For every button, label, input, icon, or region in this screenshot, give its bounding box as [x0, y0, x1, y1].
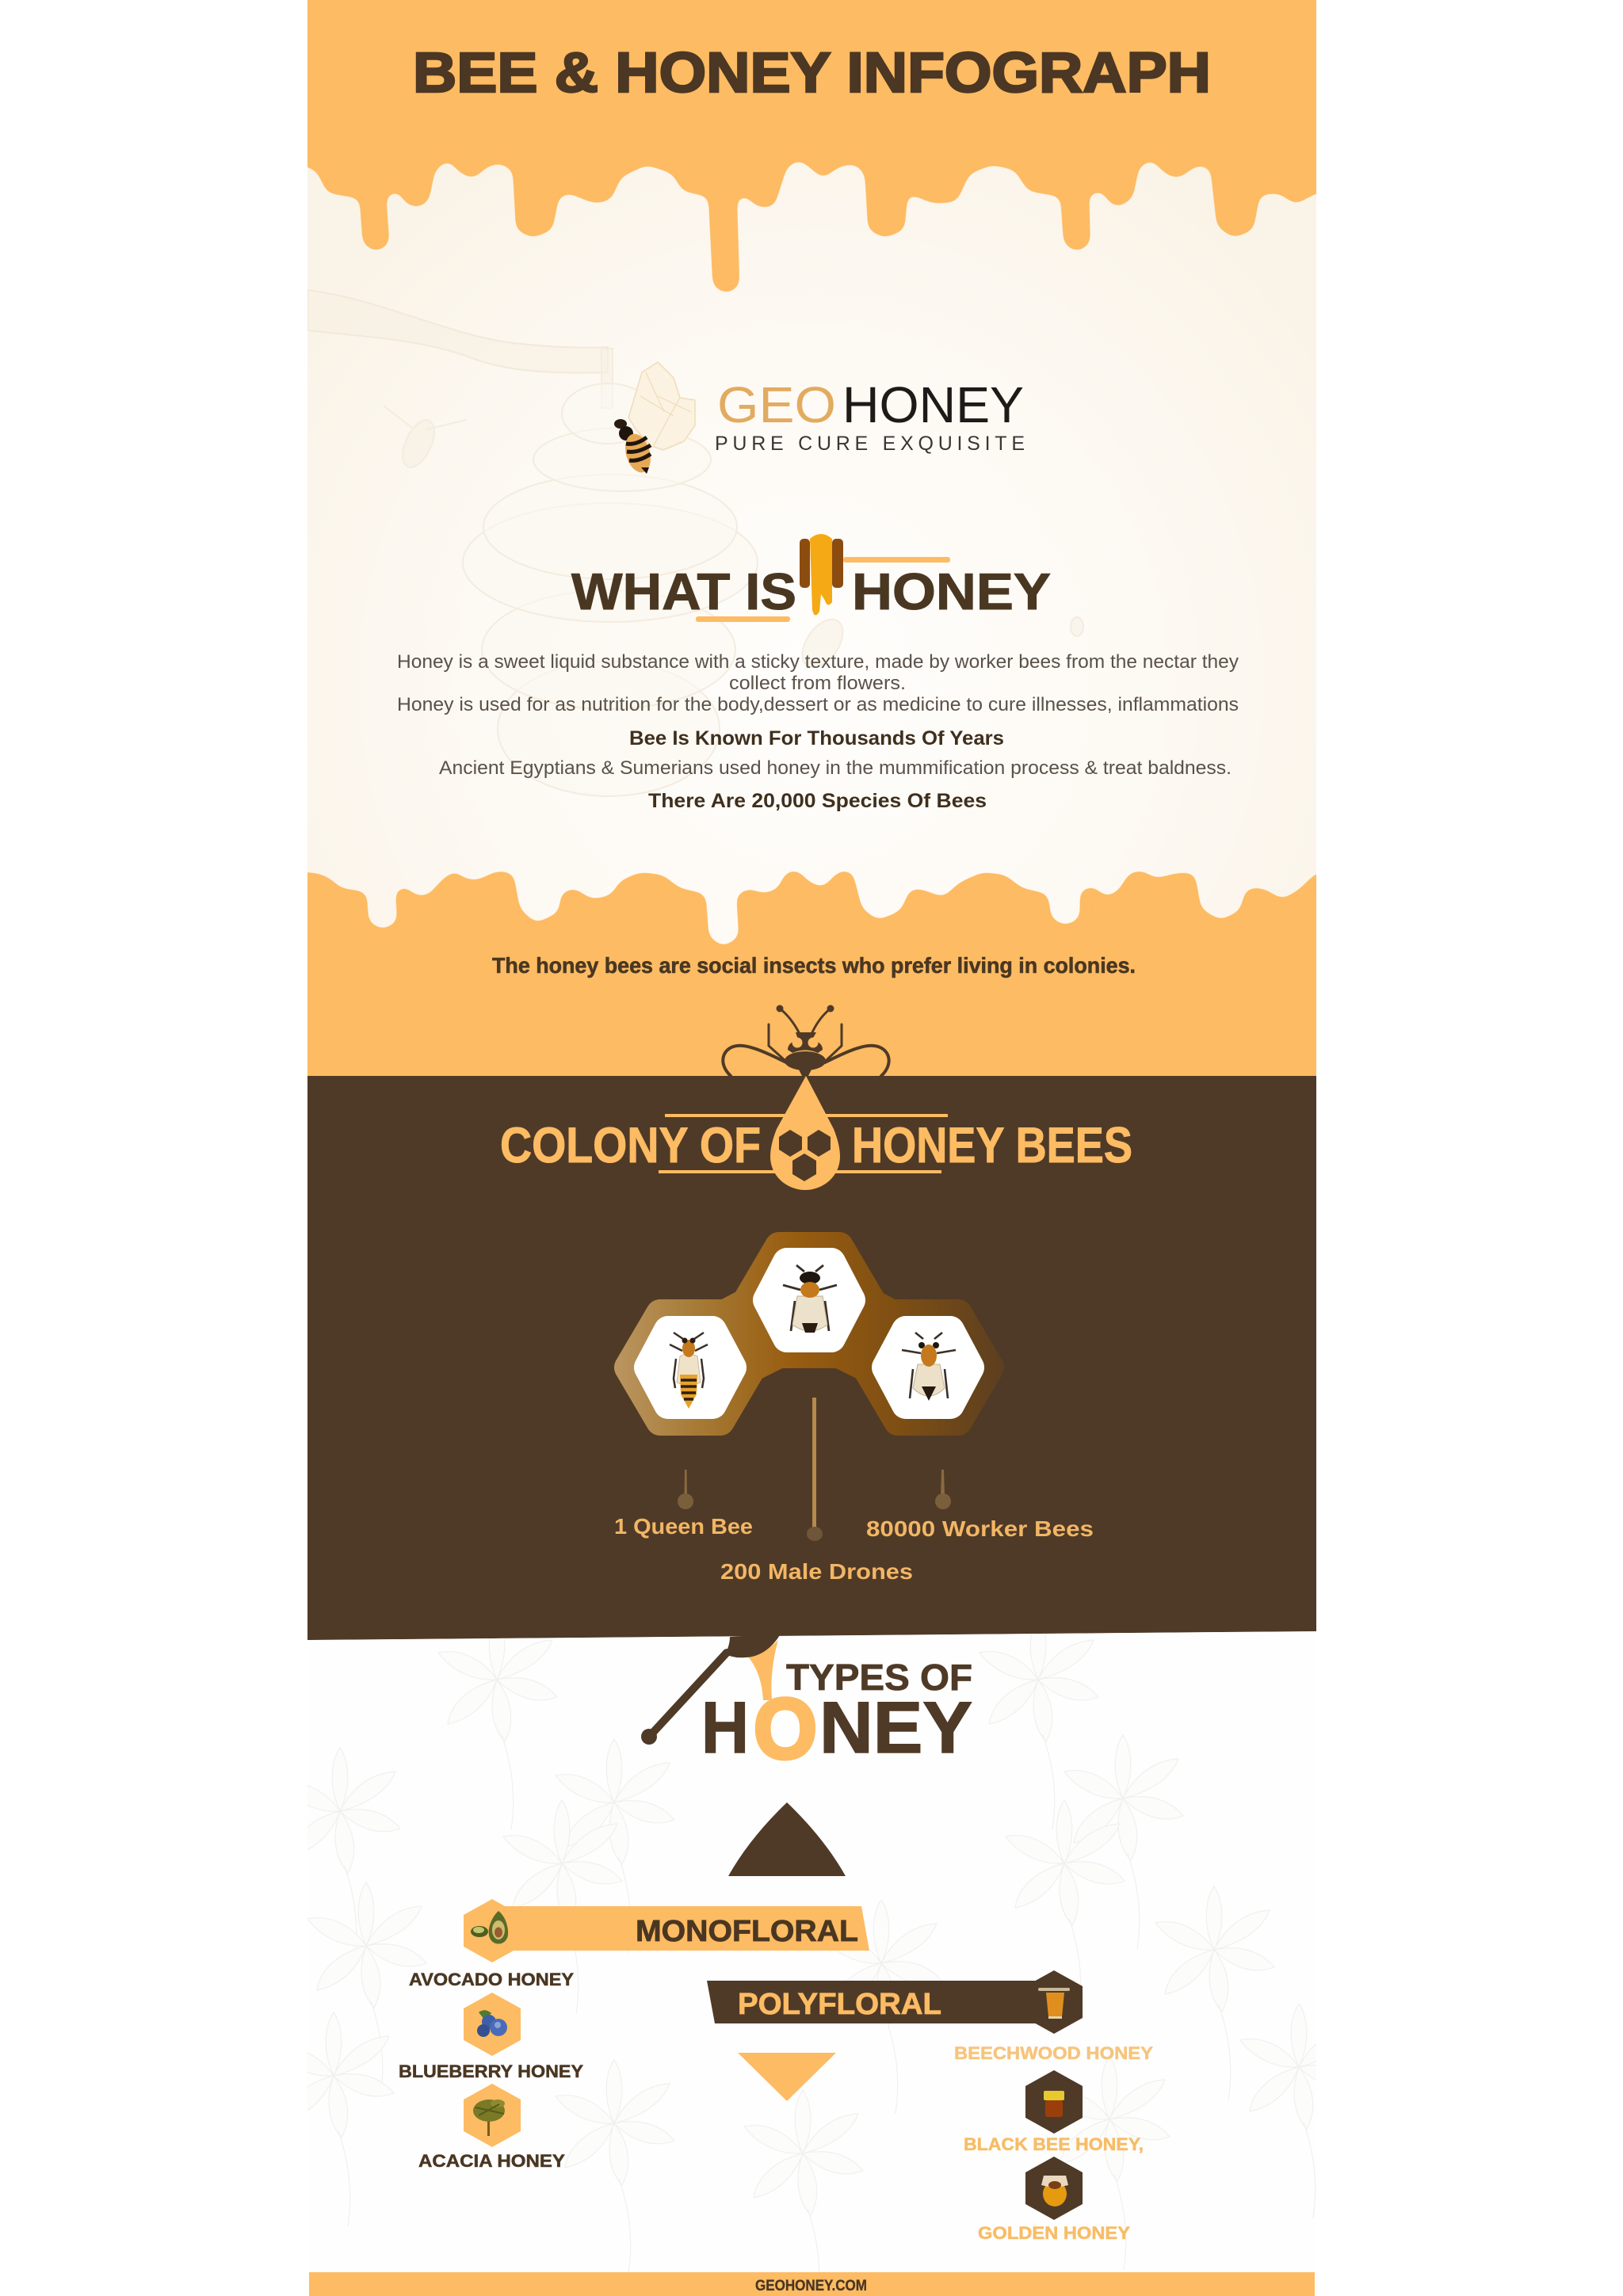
- panel: queen bee: [648, 1330, 732, 1409]
- heading: types of honey: O: [754, 1680, 817, 1776]
- label: black bee honey: BLACK BEE HONEY,: [964, 2134, 1144, 2154]
- icon: worker bee: [902, 1333, 956, 1401]
- text block: what is honey: [397, 651, 1239, 812]
- panel: cream background: [307, 0, 1316, 1081]
- section: colony of honey bees heading: COLONY OF: [500, 1118, 761, 1173]
- illustration: faint honey hive sketch: [307, 290, 1083, 796]
- icon: drone bee: [783, 1265, 837, 1333]
- logo: GeoHoney: HONEY: [842, 376, 1024, 433]
- footer: GEOHONEY.COM: [755, 2278, 867, 2294]
- stem: queen marker: [678, 1470, 693, 1509]
- panel: worker bee: [886, 1330, 970, 1405]
- section: colony of honey bees heading: HONEY BEES: [852, 1118, 1132, 1173]
- caption: social insects: The honey bees are social insects who prefer living in colonies.: [492, 953, 1136, 978]
- banner: monofloral: MONOFLORAL: [636, 1915, 858, 1948]
- icon: honey triangle: [738, 2053, 836, 2101]
- icon: queen bee: [670, 1333, 708, 1409]
- icon: avocado: [464, 1899, 521, 1962]
- icon: acacia tree: [464, 2084, 521, 2147]
- label: beechwood honey: BEECHWOOD HONEY: [954, 2043, 1153, 2063]
- logo: GeoHoney: PURE CURE EXQUISITE: [715, 433, 1025, 455]
- icon: black bee honey jar: [1025, 2070, 1083, 2134]
- label: worker count: 80000 Worker Bees: [866, 1516, 1094, 1541]
- logo: GeoHoney: GEO: [717, 376, 836, 433]
- label: queen count: 1 Queen Bee: [614, 1514, 753, 1539]
- icon: golden honey jar: [1025, 2157, 1083, 2220]
- text block: what is honey: Honey is used for as nutrition for the body,dessert or as medicine to cure illnesses, inflammations: [397, 694, 1239, 715]
- text block: what is honey: Bee Is Known For Thousands Of Years: [629, 727, 1004, 749]
- footer: [309, 2272, 1315, 2296]
- heading: types of honey: NEY: [819, 1688, 972, 1768]
- label: blueberry honey: BLUEBERRY HONEY: [399, 2061, 583, 2081]
- label: drone count: 200 Male Drones: [720, 1559, 913, 1584]
- panel: dark colony section: [307, 1076, 1316, 1640]
- icon: bee emblem: [723, 1005, 889, 1076]
- heading: what is honey: WHAT IS: [571, 563, 796, 620]
- heading: what is honey: HONEY: [852, 563, 1051, 620]
- icon: honey glass: [1025, 1970, 1083, 2034]
- text block: what is honey: Honey is a sweet liquid substance with a sticky texture, made by worker bees from the nectar they: [397, 651, 1239, 673]
- diagram: honeycomb of three bees: [628, 1246, 990, 1421]
- section: colony of honey bees heading: [500, 1005, 1132, 1190]
- title: BEE & HONEY INFOGRAPH: [413, 42, 1211, 105]
- panel: drone bee: [767, 1262, 851, 1338]
- banner: polyfloral: POLYFLORAL: [738, 1988, 941, 2021]
- middle honey drip band: [236, 858, 1442, 1122]
- stem: workers marker: [935, 1470, 951, 1509]
- column: polyfloral: [707, 1970, 1153, 2243]
- panel: flower patterned background: [307, 1631, 1316, 2272]
- banner: polyfloral: [707, 1981, 1054, 2023]
- icon: honey drop with honeycomb: [770, 1076, 840, 1190]
- logo: GeoHoney: [614, 362, 1025, 475]
- text block: what is honey: Ancient Egyptians & Sumerians used honey in the mummification process & treat baldness.: [439, 757, 1232, 779]
- heading: what is honey: [571, 534, 1051, 622]
- icon: honey dipper: [696, 534, 950, 622]
- label: acacia honey: ACACIA HONEY: [418, 2151, 565, 2171]
- icon: blueberries: [464, 1993, 521, 2056]
- banner: monofloral: [492, 1906, 869, 1951]
- honeycomb backing: [628, 1246, 990, 1421]
- heading: types of honey: [641, 1634, 972, 1776]
- label: avocado honey: AVOCADO HONEY: [409, 1970, 574, 1989]
- column: monofloral: [399, 1899, 869, 2171]
- label: golden honey: GOLDEN HONEY: [978, 2223, 1130, 2243]
- text block: what is honey: collect from flowers.: [729, 673, 906, 694]
- top honey drip band: [236, 0, 1442, 294]
- icon: logo bee: [614, 362, 695, 475]
- icon: dipper with honey: [641, 1634, 781, 1745]
- text block: what is honey: There Are 20,000 Species Of Bees: [648, 790, 987, 812]
- icon: dark triangle: [728, 1802, 846, 1876]
- stem: drones marker: [807, 1398, 823, 1541]
- heading: types of honey: H: [701, 1688, 749, 1768]
- heading: types of honey: TYPES OF: [786, 1657, 972, 1698]
